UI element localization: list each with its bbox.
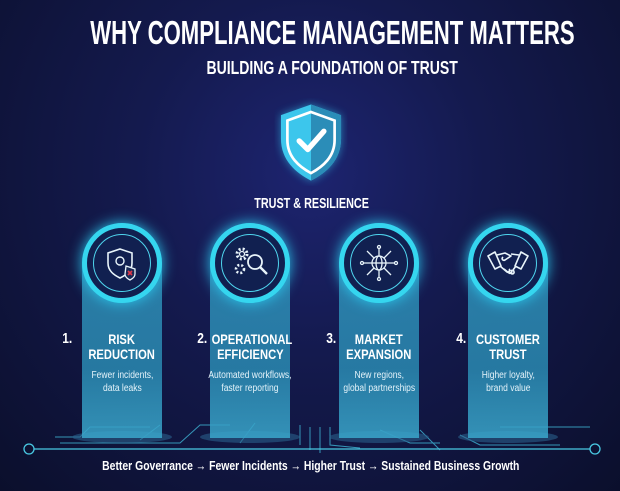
heading	[346, 331, 412, 362]
description: faster reporting	[221, 383, 279, 394]
description: global partnerships	[343, 383, 415, 394]
subtitle: BUILDING A FOUNDATION OF TRUST	[206, 58, 458, 78]
heading	[211, 331, 292, 362]
icon: gears & magnifier	[210, 223, 290, 303]
heading: EXPANSION	[346, 346, 412, 362]
heading: TRUST	[489, 346, 527, 362]
description	[91, 370, 153, 394]
description	[343, 370, 415, 394]
column 1	[82, 264, 162, 438]
description: brand value	[486, 383, 530, 394]
description	[208, 370, 292, 394]
description: Automated workflows,	[208, 370, 292, 381]
heading: RISK	[109, 331, 135, 347]
icon: globe network	[339, 223, 419, 303]
number 1: 1.	[62, 330, 72, 347]
number 4: 4.	[456, 330, 466, 347]
icon: risk shield	[82, 223, 162, 303]
icon: central shield	[276, 100, 346, 184]
circuit base	[23, 423, 601, 455]
heading: MARKET	[355, 331, 403, 347]
heading: CUSTOMER	[476, 331, 540, 347]
description: data leaks	[103, 383, 141, 394]
column 2	[210, 264, 290, 438]
number 2: 2.	[197, 330, 207, 347]
footer flow text: Better Goverrance → Fewer Incidents → Higher Trust → Sustained Business Growth	[102, 458, 520, 473]
label: trust & resilience: TRUST & RESILIENCE	[255, 195, 369, 212]
description: Higher loyalty,	[481, 370, 535, 381]
column 4	[468, 264, 548, 438]
description	[481, 370, 535, 394]
heading: REDUCTION	[89, 346, 155, 362]
heading	[476, 331, 540, 362]
icon: handshake	[468, 223, 548, 303]
heading: EFFICIENCY	[217, 346, 283, 362]
description: New regions,	[354, 370, 404, 381]
heading: OPERATIONAL	[211, 331, 292, 347]
heading	[89, 331, 155, 362]
number 3: 3.	[326, 330, 336, 347]
column 3	[339, 264, 419, 438]
description: Fewer incidents,	[91, 370, 153, 381]
title: WHY COMPLIANCE MANAGEMENT MATTERS	[90, 14, 574, 51]
